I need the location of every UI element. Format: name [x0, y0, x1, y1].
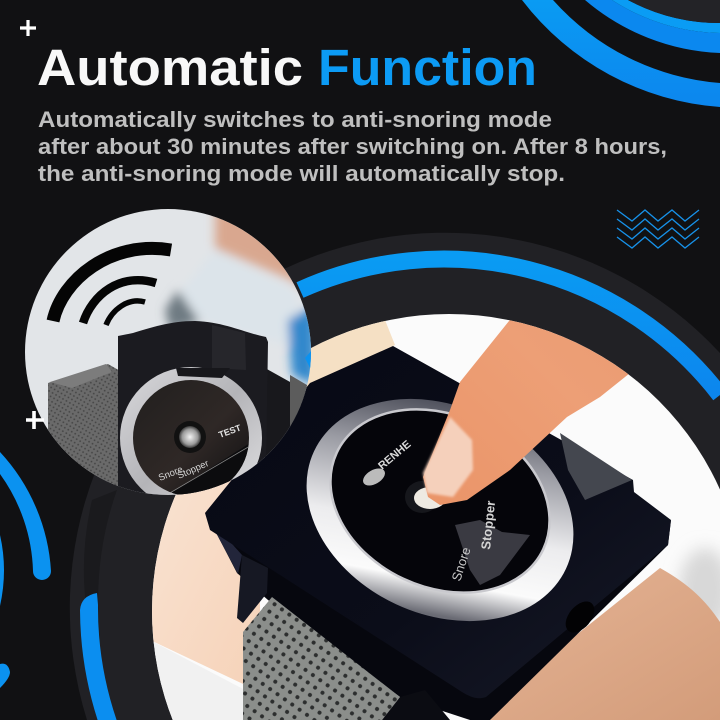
signal arcs: [53, 248, 171, 325]
silver button cap: [179, 426, 201, 448]
disc lower segment: [170, 444, 249, 494]
description text: Automatically switches to anti-snoring mode: [38, 107, 552, 132]
body highlight: [212, 325, 246, 370]
black disc: [330, 408, 550, 594]
metal ring: [120, 367, 262, 509]
right strap: [265, 370, 306, 457]
description text: [38, 107, 667, 186]
title: [37, 39, 537, 96]
device text: Snore: [449, 545, 474, 583]
description text: after about 30 minutes after switching on. After 8 hours,: [38, 134, 667, 159]
ring top dark notch: [176, 368, 230, 378]
fabric strap: [243, 597, 400, 720]
small circular photo: device close-up: [25, 205, 320, 510]
blue sliver: [305, 351, 311, 368]
plus icon top: [20, 20, 36, 36]
brand logo: [363, 468, 385, 486]
blurred background shapes: [165, 205, 320, 385]
strap fold: [50, 364, 112, 388]
Stopper label: Stopper: [176, 458, 211, 482]
center button: [405, 481, 434, 513]
description text: the anti-snoring mode will automatically stop.: [38, 161, 565, 186]
side wall lighter part: [216, 534, 242, 574]
TEST label: TEST: [217, 422, 243, 440]
finger: [423, 320, 628, 505]
soft shadow right: [679, 548, 720, 632]
cream area top: [306, 320, 395, 387]
arm skin left: [150, 470, 260, 692]
plus icon middle: [26, 411, 44, 429]
button cap: [414, 487, 446, 509]
side port: [566, 602, 594, 632]
device side wall: [207, 515, 671, 720]
lower left table: [150, 640, 245, 720]
metal bezel: [306, 398, 574, 622]
disc reflection: [455, 520, 530, 585]
brand text: RENHE: [376, 438, 413, 472]
left strap: [48, 364, 122, 488]
right strap fabric: [290, 375, 308, 426]
main photo: finger pressing the device: [150, 290, 720, 720]
title: Automatic: [37, 39, 303, 96]
strap lug: [237, 555, 268, 623]
device face: [205, 346, 671, 698]
lower clasp: [382, 697, 450, 720]
title: Function: [318, 39, 537, 96]
zigzag decoration: [617, 210, 699, 248]
highlight triangle right: [560, 433, 632, 500]
fingernail: [423, 417, 473, 497]
top-right concentric rings: [522, 0, 720, 107]
dark disc: [133, 380, 249, 496]
Snore label: Snore: [157, 464, 185, 484]
left blue arcs: [0, 452, 51, 688]
device body: [118, 321, 268, 510]
wrist: [470, 568, 720, 720]
button: [174, 421, 206, 453]
dark ring around the main photo: [70, 233, 720, 720]
device text: Stopper: [478, 500, 498, 550]
